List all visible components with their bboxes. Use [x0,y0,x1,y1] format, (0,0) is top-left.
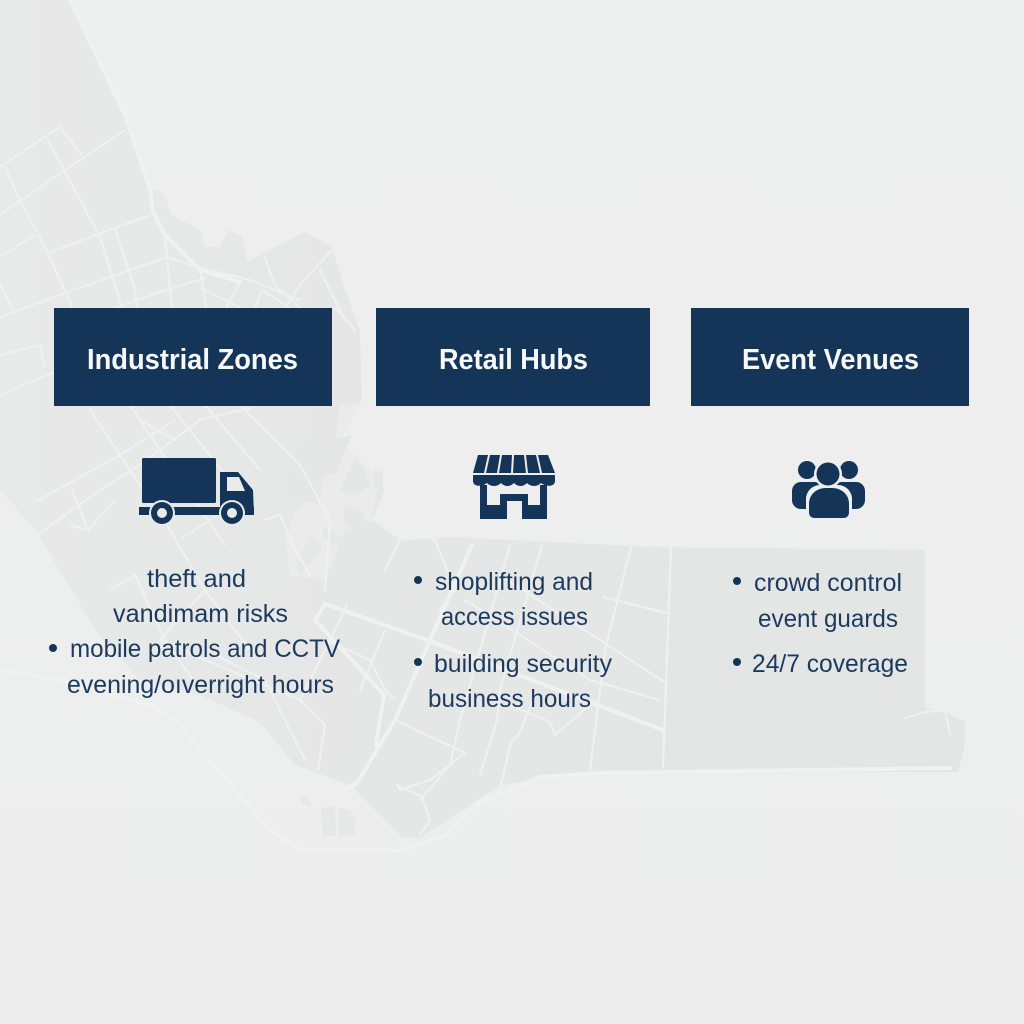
text: retail risks and services: access issues [441,603,588,631]
text: industrial risks and services: theft and [147,565,246,593]
panel: Retail Hubs [376,308,650,713]
map: harbour channels [285,405,380,580]
map: islets [300,795,356,837]
map: street grid [0,127,950,835]
text: industrial risks and services [49,565,340,699]
text: retail risks and services [414,568,612,713]
map: coastal roads [0,0,950,851]
text: retail risks and services: business hours [428,685,591,713]
icon: storefront [473,455,555,519]
heading box: Retail Hubs [376,308,650,406]
text: event risks and services [733,569,908,678]
panel: Industrial Zones [49,308,340,699]
text: retail risks and services: building security [434,650,612,678]
text: industrial risks and services: evening/oıverright hours [67,671,334,699]
text: event risks and services: event guards [758,605,898,633]
heading box: Industrial Zones: Industrial Zones [87,344,298,376]
heading box: Event Venues: Event Venues [742,344,919,376]
text: event risks and services: crowd control [754,569,902,597]
map: harbour blocks [288,435,383,575]
background map [0,0,965,851]
heading box: Retail Hubs: Retail Hubs [439,344,588,376]
heading box: Industrial Zones [54,308,332,406]
text: industrial risks and services: vandimam risks [113,600,288,628]
map: land mass [0,0,965,838]
icon: group of people [792,460,865,521]
heading box: Event Venues [691,308,969,406]
panel: Event Venues [691,308,969,678]
text: event risks and services: 24/7 coverage [752,650,908,678]
icon: delivery truck [139,458,254,526]
text: industrial risks and services: mobile patrols and CCTV [70,635,340,663]
text: retail risks and services: shoplifting and [435,568,593,596]
